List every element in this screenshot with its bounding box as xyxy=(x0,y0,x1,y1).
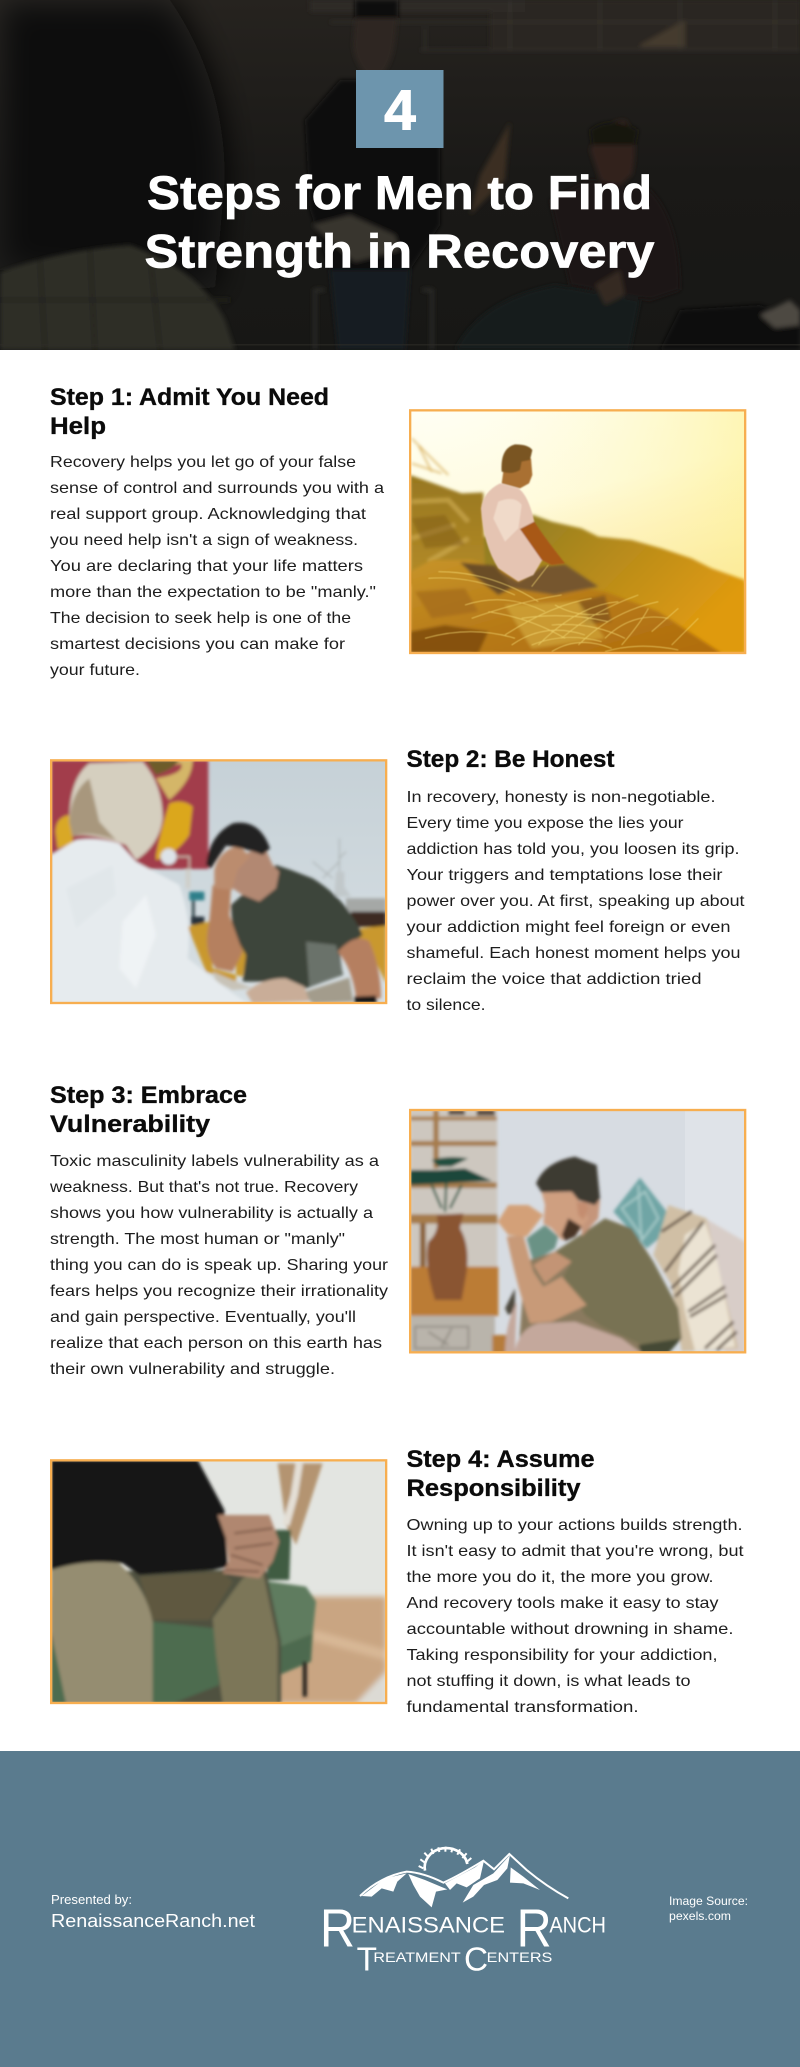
step 1 heading: Help xyxy=(50,413,106,440)
step 4 body: fundamental transformation. xyxy=(406,1699,638,1716)
sofa xyxy=(188,922,248,982)
hands xyxy=(218,1515,279,1578)
title: Steps for Men to Find xyxy=(147,166,652,219)
presented by xyxy=(51,1893,255,1931)
presented by: RenaissanceRanch.net xyxy=(51,1911,255,1931)
logo: Renaissance Ranch Treatment Centers xyxy=(320,1847,606,1979)
step 2 body: power over you. At first, speaking up about xyxy=(406,893,745,910)
step 4 body: the more you do it, the more you grow. xyxy=(406,1569,714,1586)
image source: Image Source: xyxy=(669,1894,748,1908)
step 4 heading: Step 4: Assume xyxy=(406,1446,594,1473)
step 2 body: addiction has told you, you loosen its grip. xyxy=(406,841,740,858)
step 3 heading: Step 3: Embrace xyxy=(50,1082,247,1109)
logo wordmark: C xyxy=(464,1942,488,1979)
step 3 heading xyxy=(50,1082,247,1138)
man xyxy=(231,865,363,988)
step 4 body xyxy=(406,1517,744,1716)
step 3 heading: Vulnerability xyxy=(50,1111,211,1138)
footer panel xyxy=(0,1751,800,2067)
logo wordmark: R xyxy=(517,1900,552,1959)
logo wordmark: R xyxy=(320,1900,355,1959)
hoodie xyxy=(51,1460,228,1575)
logo wordmark: T xyxy=(357,1942,377,1979)
step 2 body: In recovery, honesty is non-negotiable. xyxy=(406,789,716,806)
step 4 heading: Responsibility xyxy=(406,1475,581,1502)
step 1 body: your future. xyxy=(50,662,140,679)
step 1 body: sense of control and surrounds you with a xyxy=(50,480,384,497)
image source: pexels.com xyxy=(669,1909,731,1923)
logo wordmark: ENTERS xyxy=(487,1949,552,1965)
step 1 body xyxy=(50,454,384,679)
step 1 body: more than the expectation to be "manly." xyxy=(50,584,376,601)
step 4 body: not stuffing it down, is what leads to xyxy=(406,1673,691,1690)
step 3 body: shows you how vulnerability is actually a xyxy=(50,1205,373,1222)
trousers xyxy=(139,1572,233,1620)
step 1 body: The decision to seek help is one of the xyxy=(50,610,351,627)
step 1 body: You are declaring that your life matters xyxy=(50,558,363,575)
step 1 body: Recovery helps you let go of your false xyxy=(50,454,356,471)
presented by: Presented by: xyxy=(51,1893,132,1907)
step 3 body: Toxic masculinity labels vulnerability as a xyxy=(50,1153,379,1170)
logo icon: sun and mountains xyxy=(360,1847,568,1907)
woman hair xyxy=(69,762,163,860)
logo wordmark: REATMENT xyxy=(373,1949,461,1965)
chair xyxy=(266,1530,291,1580)
number badge: 4 xyxy=(384,78,416,142)
step 3 body: weakness. But that's not true. Recovery xyxy=(49,1179,358,1196)
step 1 body: smartest decisions you can make for xyxy=(50,636,346,653)
step 4 body: Taking responsibility for your addiction, xyxy=(406,1647,718,1664)
painting xyxy=(51,760,208,869)
step 3 body: their own vulnerability and struggle. xyxy=(50,1361,335,1378)
step 4 body: Owning up to your actions builds strength. xyxy=(406,1517,742,1534)
title xyxy=(144,166,654,278)
man xyxy=(518,1228,643,1352)
panel: step 1 text xyxy=(50,384,384,679)
logo wordmark xyxy=(320,1900,606,1979)
step 4 heading xyxy=(406,1446,594,1502)
man xyxy=(481,444,565,582)
step 2 heading: Step 2: Be Honest xyxy=(406,746,615,773)
photo: man praying on sofa xyxy=(410,1110,745,1353)
blanket xyxy=(653,1205,738,1352)
step 3 body: and gain perspective. Eventually, you'll xyxy=(50,1309,356,1326)
image source xyxy=(669,1894,748,1923)
panel: step 4 text xyxy=(406,1446,744,1716)
number badge xyxy=(356,70,444,148)
plant xyxy=(432,1172,462,1212)
step 3 body: strength. The most human or "manly" xyxy=(50,1231,345,1248)
step 2 body: reclaim the voice that addiction tried xyxy=(406,971,702,988)
photo: man with head in hand at therapist xyxy=(51,760,386,1003)
logo wordmark: ANCH xyxy=(549,1913,606,1938)
step 3 body: thing you can do is speak up. Sharing your xyxy=(50,1257,389,1274)
woman shirt xyxy=(51,839,248,1003)
step 1 heading: Step 1: Admit You Need xyxy=(50,384,329,411)
step 2 body: Every time you expose the lies your xyxy=(406,815,684,832)
step 3 body: realize that each person on this earth has xyxy=(50,1335,382,1352)
step 1 body: real support group. Acknowledging that xyxy=(50,506,367,523)
shelf xyxy=(410,1110,497,1268)
step 2 body: Your triggers and temptations lose their xyxy=(406,867,723,884)
step 4 body: accountable without drowning in shame. xyxy=(406,1621,734,1638)
photo: clasped hands on green chair xyxy=(51,1460,386,1703)
panel: step 3 text xyxy=(49,1082,389,1378)
step 2 body: shameful. Each honest moment helps you xyxy=(406,945,740,962)
sofa and cushions xyxy=(705,1218,745,1353)
step 1 body: you need help isn't a sign of weakness. xyxy=(50,532,358,549)
header panel xyxy=(0,0,800,350)
header background photo: group therapy xyxy=(0,0,800,350)
title: Strength in Recovery xyxy=(144,224,654,278)
panel: step 2 text xyxy=(406,746,745,1014)
step 1 heading xyxy=(50,384,329,440)
step 2 body xyxy=(406,789,745,1014)
step 2 body: your addiction might feel foreign or even xyxy=(406,919,730,936)
photo: man sitting on hillside at sunset xyxy=(410,410,745,653)
step 3 body: fears helps you recognize their irrationality xyxy=(50,1283,388,1300)
step 4 body: It isn't easy to admit that you're wrong, but xyxy=(406,1543,744,1560)
step 4 body: And recovery tools make it easy to stay xyxy=(406,1595,718,1612)
logo wordmark: ENAISSANCE xyxy=(352,1913,505,1938)
lamp and shelf xyxy=(161,849,177,865)
step 2 body: to silence. xyxy=(406,997,486,1014)
vase xyxy=(427,1213,467,1300)
grass strands xyxy=(425,565,698,652)
step 3 body xyxy=(49,1153,389,1378)
